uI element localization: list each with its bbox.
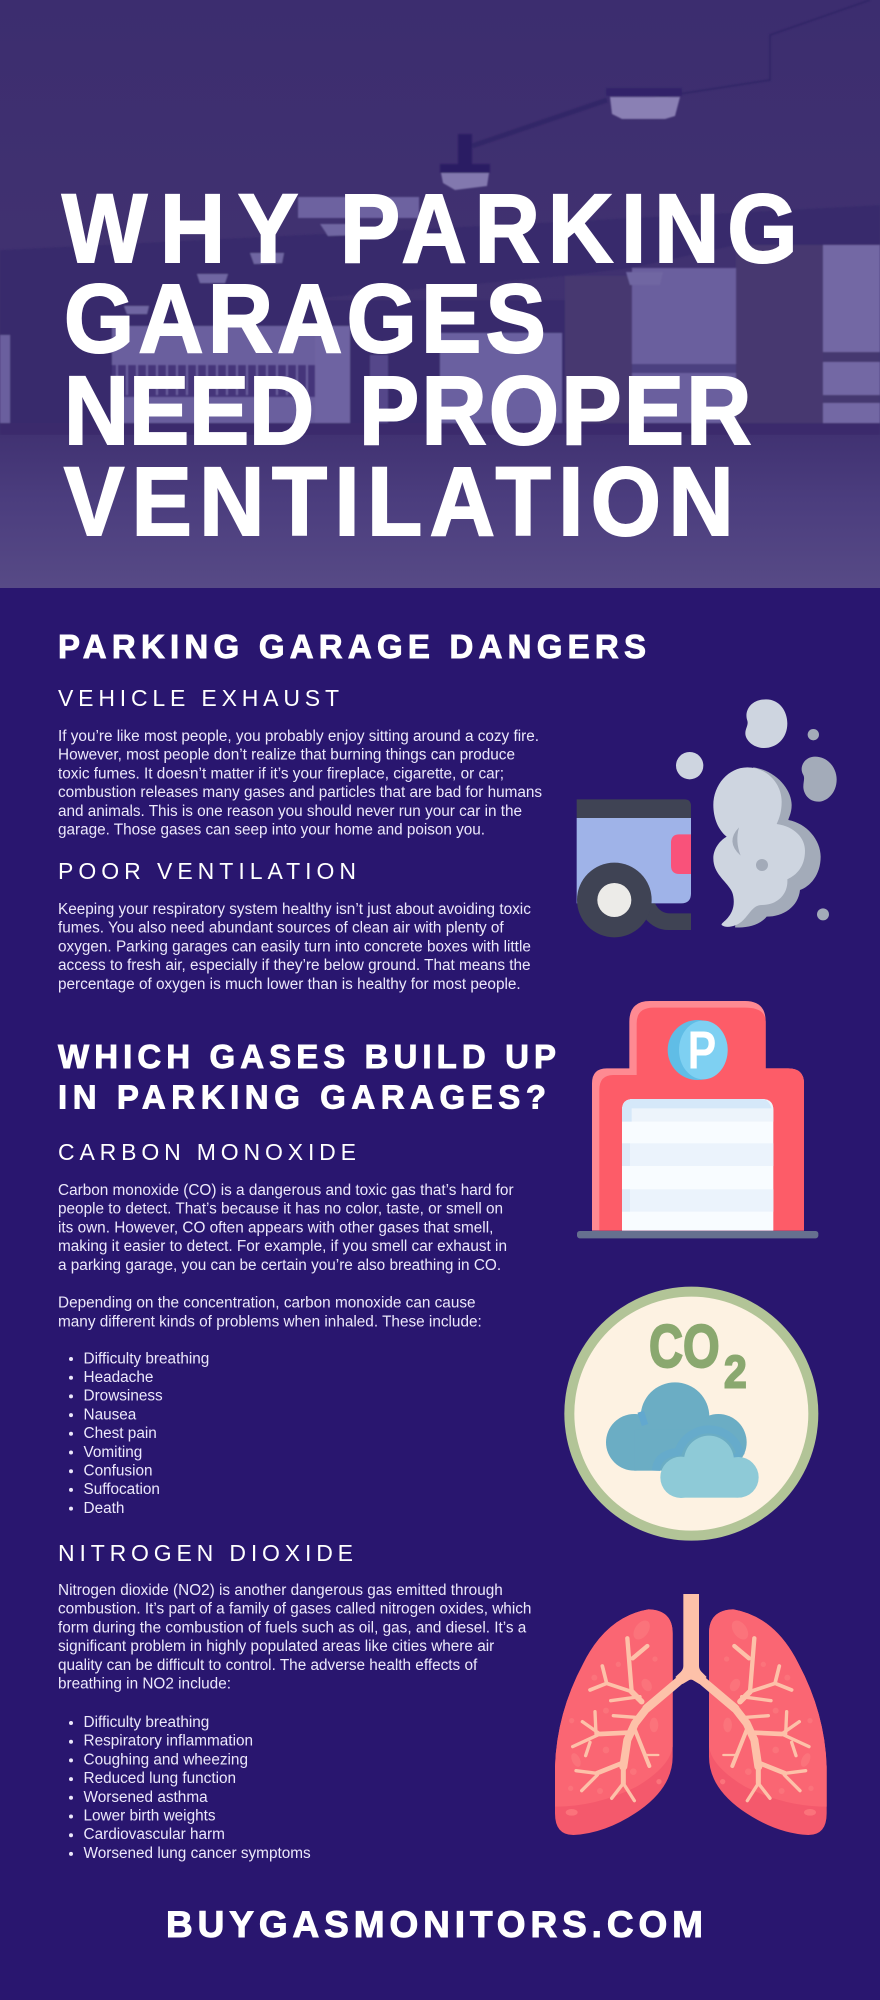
- text block: nitrogen dioxide: form during the combustion of fuels such as oil, gas, and diesel. It’s a: [58, 1619, 527, 1636]
- text block: vehicle exhaust: toxic fumes. It doesn’t matter if it’s your fireplace, cigarette, or car;: [58, 765, 504, 782]
- title: PARKING: [340, 174, 798, 283]
- list: carbon monoxide symptoms: Nausea: [84, 1406, 137, 1423]
- text block: carbon monoxide: a parking garage, you can be certain you’re also breathing in CO.: [58, 1257, 501, 1274]
- small cloud: [660, 1436, 759, 1498]
- list: carbon monoxide symptoms: Vomiting: [84, 1444, 142, 1461]
- subheading: vehicle exhaust: VEHICLE EXHAUST: [58, 685, 339, 711]
- text block: vehicle exhaust: If you’re like most people, you probably enjoy sitting around a cozy fire.: [58, 728, 539, 745]
- list: carbon monoxide symptoms: Death: [84, 1500, 124, 1517]
- heading: which gases build up: IN PARKING GARAGES?: [58, 1078, 546, 1116]
- title: VENTILATION: [64, 447, 734, 556]
- subheading: carbon monoxide: CARBON MONOXIDE: [58, 1139, 356, 1165]
- title: GARAGES: [64, 264, 546, 373]
- text block: vehicle exhaust: combustion releases many gases and particles that are bad for humans: [58, 784, 542, 801]
- text block: carbon monoxide problems intro: [58, 1294, 482, 1330]
- text block: carbon monoxide: its own. However, CO often appears with other gases that smell,: [58, 1219, 493, 1236]
- text block: poor ventilation: access to fresh air, especially if they’re below ground. That means the: [58, 957, 531, 974]
- list: nitrogen dioxide effects: Lower birth weights: [84, 1808, 216, 1824]
- heading: which gases build up: WHICH GASES BUILD UP: [58, 1038, 556, 1075]
- list: carbon monoxide symptoms: Difficulty breathing: [84, 1350, 209, 1367]
- large cloud: [606, 1382, 747, 1471]
- text block: nitrogen dioxide: [58, 1582, 531, 1692]
- heading: parking garage dangers: PARKING GARAGE DANGERS: [58, 628, 646, 665]
- CO2 label: CO: [649, 1313, 720, 1380]
- tail light: [671, 834, 691, 874]
- text block: nitrogen dioxide: Nitrogen dioxide (NO2) is another dangerous gas emitted through: [58, 1582, 503, 1599]
- list: nitrogen dioxide effects: Difficulty breathing: [84, 1714, 209, 1731]
- text block: carbon monoxide problems intro: many different kinds of problems when inhaled. These include:: [58, 1314, 482, 1330]
- text block: nitrogen dioxide: significant problem in highly populated areas like cities where air: [58, 1638, 494, 1655]
- parking sign: P: [688, 1022, 716, 1081]
- garage door: [622, 1099, 773, 1231]
- text block: nitrogen dioxide: breathing in NO2 include:: [58, 1676, 231, 1692]
- car roof bar: [577, 799, 691, 818]
- list: nitrogen dioxide effects: Cardiovascular harm: [84, 1826, 225, 1843]
- left lung: [555, 1609, 683, 1835]
- list: carbon monoxide symptoms: [69, 1350, 209, 1517]
- icon: parking garage building: [577, 1001, 818, 1238]
- text block: poor ventilation: Keeping your respiratory system healthy isn’t just about avoiding toxic: [58, 901, 531, 918]
- right lung: [698, 1609, 827, 1835]
- text block: carbon monoxide: Carbon monoxide (CO) is a dangerous and toxic gas that’s hard for: [58, 1182, 514, 1199]
- list: nitrogen dioxide effects: [69, 1714, 311, 1862]
- smoke cloud: [713, 767, 821, 928]
- subheading: nitrogen dioxide: NITROGEN DIOXIDE: [58, 1540, 353, 1566]
- text block: poor ventilation: oxygen. Parking garages can easily turn into concrete boxes with little: [58, 938, 531, 955]
- footer: website: BUYGASMONITORS.COM: [166, 1904, 703, 1945]
- text block: nitrogen dioxide: combustion. It’s part of a family of gases called nitrogen oxides, which: [58, 1601, 531, 1618]
- subheading: poor ventilation: POOR VENTILATION: [58, 858, 356, 884]
- text block: vehicle exhaust: [58, 728, 542, 838]
- smoke puffs: [676, 699, 837, 920]
- list: carbon monoxide symptoms: Confusion: [84, 1462, 153, 1480]
- text block: poor ventilation: percentage of oxygen is much lower than is healthy for most people.: [58, 976, 521, 993]
- text block: vehicle exhaust: However, most people don’t realize that burning things can produce: [58, 747, 515, 764]
- list: nitrogen dioxide effects: Coughing and wheezing: [84, 1751, 248, 1768]
- bumper: [645, 903, 691, 930]
- ground line: [577, 1231, 818, 1238]
- list: carbon monoxide symptoms: Suffocation: [84, 1481, 160, 1498]
- wheel: [577, 863, 652, 937]
- list: nitrogen dioxide effects: Worsened asthma: [84, 1789, 208, 1806]
- text block: vehicle exhaust: and animals. This is one reason you should never run your car in the: [58, 803, 522, 820]
- text block: poor ventilation: fumes. You also need abundant sources of clean air with plenty of: [58, 920, 504, 937]
- parking sign: [668, 1020, 728, 1081]
- text block: carbon monoxide: [58, 1182, 514, 1274]
- icon: lungs: [555, 1594, 827, 1835]
- list: nitrogen dioxide effects: Respiratory inflammation: [84, 1733, 253, 1750]
- list: carbon monoxide symptoms: Headache: [84, 1369, 153, 1386]
- text block: vehicle exhaust: garage. Those gases can seep into your home and poison you.: [58, 822, 485, 838]
- hero: parking garage photo: [0, 0, 880, 588]
- title: PROPER: [359, 356, 751, 465]
- list: carbon monoxide symptoms: Drowsiness: [84, 1388, 163, 1405]
- car body: [577, 818, 691, 903]
- text block: carbon monoxide: making it easier to detect. For example, if you smell car exhaust in: [58, 1238, 507, 1255]
- heading: which gases build up: [58, 1038, 556, 1116]
- title: [62, 174, 798, 556]
- list: carbon monoxide symptoms: Chest pain: [84, 1425, 157, 1442]
- CO2 label: 2: [724, 1346, 747, 1397]
- text block: carbon monoxide problems intro: Depending on the concentration, carbon monoxide can cause: [58, 1294, 476, 1312]
- icon: CO2 cloud badge: [564, 1287, 818, 1541]
- icon: car exhaust and smoke: [577, 699, 837, 937]
- text block: nitrogen dioxide: quality can be difficult to control. The adverse health effects of: [58, 1657, 478, 1674]
- text block: poor ventilation: [58, 901, 531, 993]
- list: nitrogen dioxide effects: Worsened lung cancer symptoms: [84, 1845, 311, 1862]
- trachea: [675, 1594, 707, 1684]
- title: WHY: [62, 174, 298, 283]
- title: NEED: [64, 356, 314, 465]
- text block: carbon monoxide: people to detect. That’s because it has no color, taste, or smell on: [58, 1201, 503, 1218]
- list: nitrogen dioxide effects: Reduced lung function: [84, 1770, 236, 1787]
